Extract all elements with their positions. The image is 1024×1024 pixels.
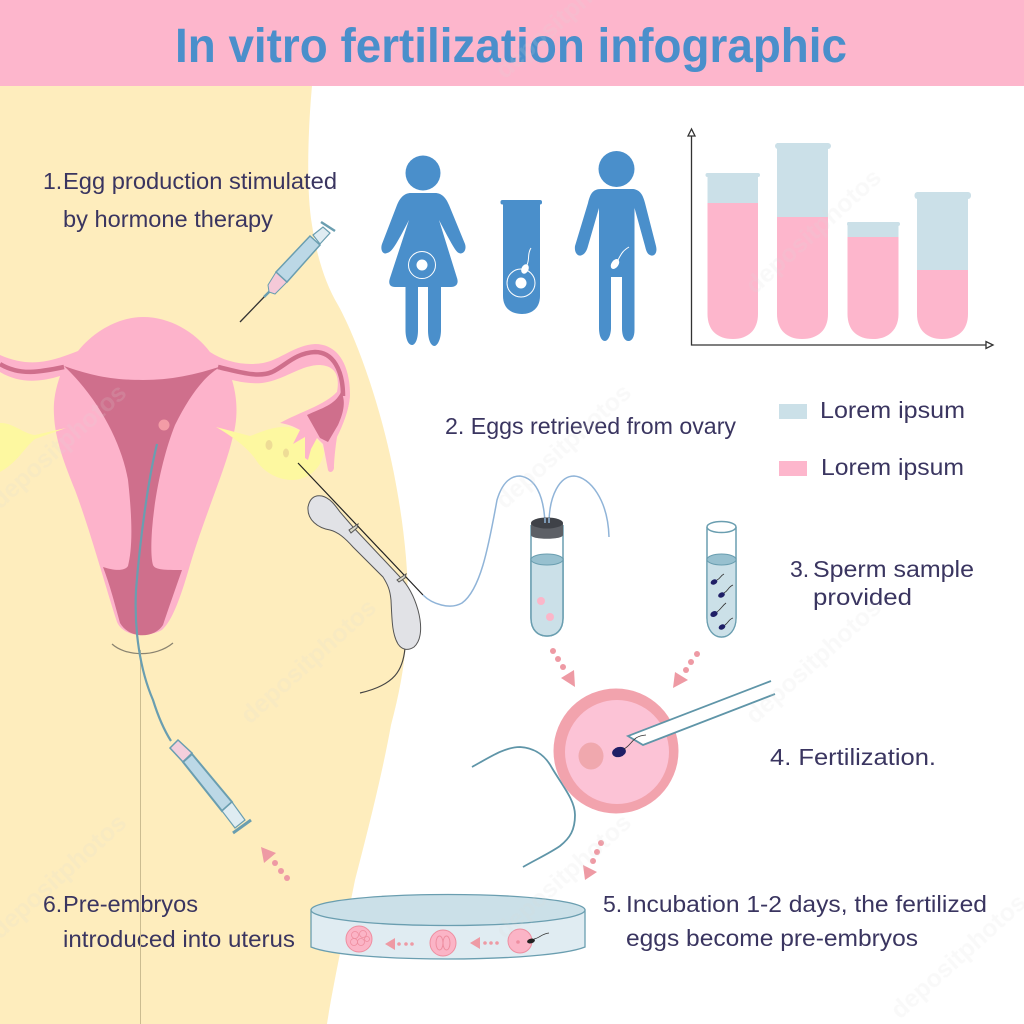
arrow: syringe to uterus <box>261 847 290 881</box>
embryo: morula <box>346 926 372 952</box>
arrow: fertilization to incubation <box>583 840 604 880</box>
icon: egg collection tube <box>531 518 563 636</box>
title: In vitro fertilization infographic <box>175 20 847 73</box>
step 1 text: 1. <box>43 168 62 194</box>
ovary follicles <box>266 440 289 458</box>
step 3 text: provided <box>813 584 912 610</box>
needle clips <box>349 524 406 582</box>
needle <box>298 463 423 595</box>
legend: Lorem ipsum <box>821 454 964 480</box>
step 5 text: 5. <box>603 891 622 917</box>
watermarks: depositphotos <box>235 593 382 729</box>
step 3 text: 3. <box>790 556 809 582</box>
injection pipette <box>628 681 775 745</box>
icon: transfer syringe <box>170 740 251 833</box>
panel: body silhouette <box>0 86 408 1024</box>
watermarks: depositphotos <box>490 378 637 514</box>
uterus body <box>0 317 350 635</box>
egg cell <box>554 688 678 814</box>
tube bar 3 <box>847 222 900 339</box>
suction tubing <box>423 476 609 606</box>
step 5 text: eggs become pre-embryos <box>626 925 918 951</box>
icon: test tube with egg and sperm <box>500 200 542 314</box>
legend: Lorem ipsum <box>820 397 965 423</box>
uterine cavity <box>64 366 222 635</box>
ultrasound probe <box>308 496 421 649</box>
sperm being injected <box>611 735 646 759</box>
fallopian tubes <box>0 352 343 396</box>
cervix arc <box>112 643 173 654</box>
tube cap <box>531 523 563 539</box>
step 5 text <box>603 891 987 951</box>
vertical body line <box>140 650 142 1024</box>
step 1 text: by hormone therapy <box>63 206 273 232</box>
watermarks: depositphotos <box>740 163 887 299</box>
embryo: two cell <box>430 930 456 956</box>
embryo: fertilized egg <box>508 929 549 953</box>
petri dish <box>311 894 585 959</box>
arrow: dish step two <box>385 938 414 950</box>
watermarks: depositphotos <box>740 593 887 729</box>
step 3 text <box>790 556 974 610</box>
legend <box>779 397 965 480</box>
chart: test tube bars <box>688 129 993 348</box>
right ovary <box>216 427 324 480</box>
watermarks: depositphotos <box>490 808 637 944</box>
icon: hormone syringe <box>240 222 335 322</box>
tube bar 4 <box>914 192 971 339</box>
right fimbria <box>307 392 344 442</box>
step 6 text: introduced into uterus <box>63 926 295 952</box>
step 1 text <box>43 168 337 232</box>
tube bar 2 <box>775 143 831 339</box>
tube bar 1 <box>706 173 760 339</box>
arrow: dish step one <box>470 937 499 949</box>
step 6 text <box>43 891 295 952</box>
arrow: eggs to fertilization <box>550 648 575 687</box>
chart axes <box>688 129 993 348</box>
step 3 text: Sperm sample <box>813 556 974 582</box>
sperm cells <box>709 578 726 631</box>
icon: man <box>575 151 656 341</box>
step 5 text: Incubation 1-2 days, the fertilized <box>626 891 987 917</box>
step 6 text: Pre-embryos <box>63 891 198 917</box>
left ovary <box>0 423 66 472</box>
retrieval needle and probe <box>298 463 423 693</box>
step 2 text: 2. Eggs retrieved from ovary <box>445 413 736 439</box>
cable <box>360 648 405 693</box>
uterus diagram <box>0 317 350 635</box>
step 1 text: Egg production stimulated <box>63 168 337 194</box>
icon: sperm sample tube <box>707 522 736 637</box>
icon: woman <box>381 156 466 346</box>
holding pipette <box>472 747 575 867</box>
catheter <box>136 444 171 741</box>
step 6 text: 6. <box>43 891 62 917</box>
fimbria <box>280 392 350 472</box>
arrow: sperm to fertilization <box>673 651 700 688</box>
embryo in uterus <box>158 420 170 430</box>
step 4 text: 4. Fertilization. <box>770 744 936 770</box>
title banner <box>0 0 1024 86</box>
